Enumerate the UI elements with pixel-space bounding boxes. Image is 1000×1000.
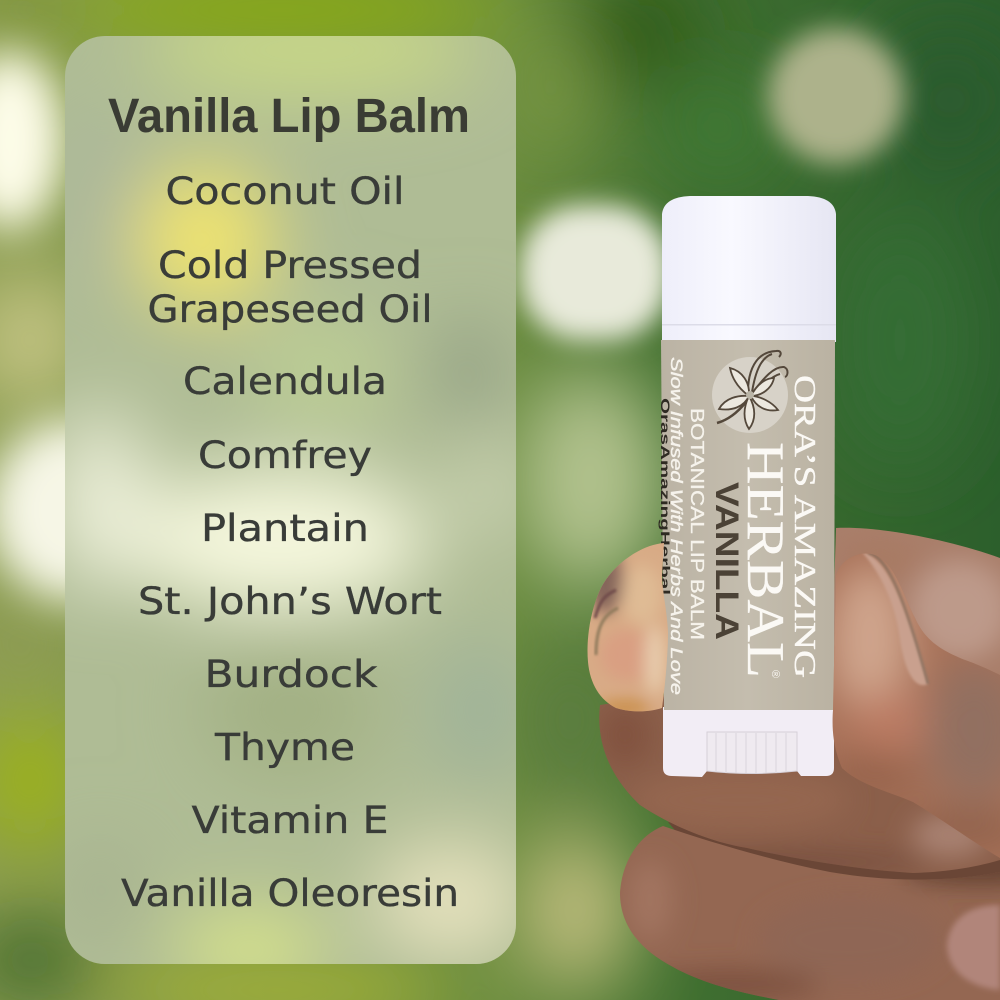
- ingredient list: Vitamin E: [192, 799, 388, 842]
- label vertical text: ORA’S AMAZING: [788, 375, 823, 678]
- fingernail: [947, 905, 1000, 990]
- label vertical text: [736, 375, 823, 678]
- heading: Vanilla Lip Balm: [108, 90, 470, 143]
- ingredient list: Burdock: [204, 653, 378, 696]
- ingredient list: Thyme: [214, 726, 355, 769]
- label website text: OrasAmazingHerbal: [658, 398, 672, 595]
- ingredient list: Grapeseed Oil: [148, 288, 432, 331]
- ingredient list: Vanilla Oleoresin: [121, 872, 459, 915]
- product label: Slow Infused With Herbs And Love: [667, 357, 686, 695]
- frosted ingredients panel: [65, 36, 516, 964]
- tube cap: [662, 196, 836, 342]
- label vertical text: HERBAL: [736, 442, 794, 678]
- ingredient list: Coconut Oil: [166, 170, 404, 213]
- ingredient list: [121, 170, 459, 915]
- tube base: [663, 707, 834, 777]
- ingredient list: Plantain: [201, 507, 369, 550]
- icon: vanilla flower: [712, 351, 788, 433]
- product label: BOTANICAL LIP BALM: [687, 408, 707, 640]
- hand: palm shadow: [668, 700, 1000, 900]
- hand: middle finger: [590, 690, 1000, 880]
- nail edge: [596, 608, 618, 655]
- icon: vanilla lip balm tube: [658, 196, 836, 777]
- hand: back finger: [834, 528, 1000, 675]
- base dial: [707, 732, 797, 774]
- product label: [661, 340, 835, 710]
- cap collar line: [662, 324, 836, 326]
- hand: index fingertip: [588, 543, 668, 712]
- product label: VANILLA: [709, 482, 745, 640]
- thumbnail: [862, 552, 928, 685]
- ingredient list: St. John’s Wort: [138, 580, 442, 623]
- ingredient list: Cold Pressed: [158, 244, 422, 287]
- ingredient list: Comfrey: [198, 434, 372, 477]
- hand: thumb: [832, 554, 1000, 858]
- hand: third finger: [610, 820, 1000, 1000]
- label vertical text: ®: [769, 670, 781, 678]
- ingredient list: Calendula: [183, 360, 387, 403]
